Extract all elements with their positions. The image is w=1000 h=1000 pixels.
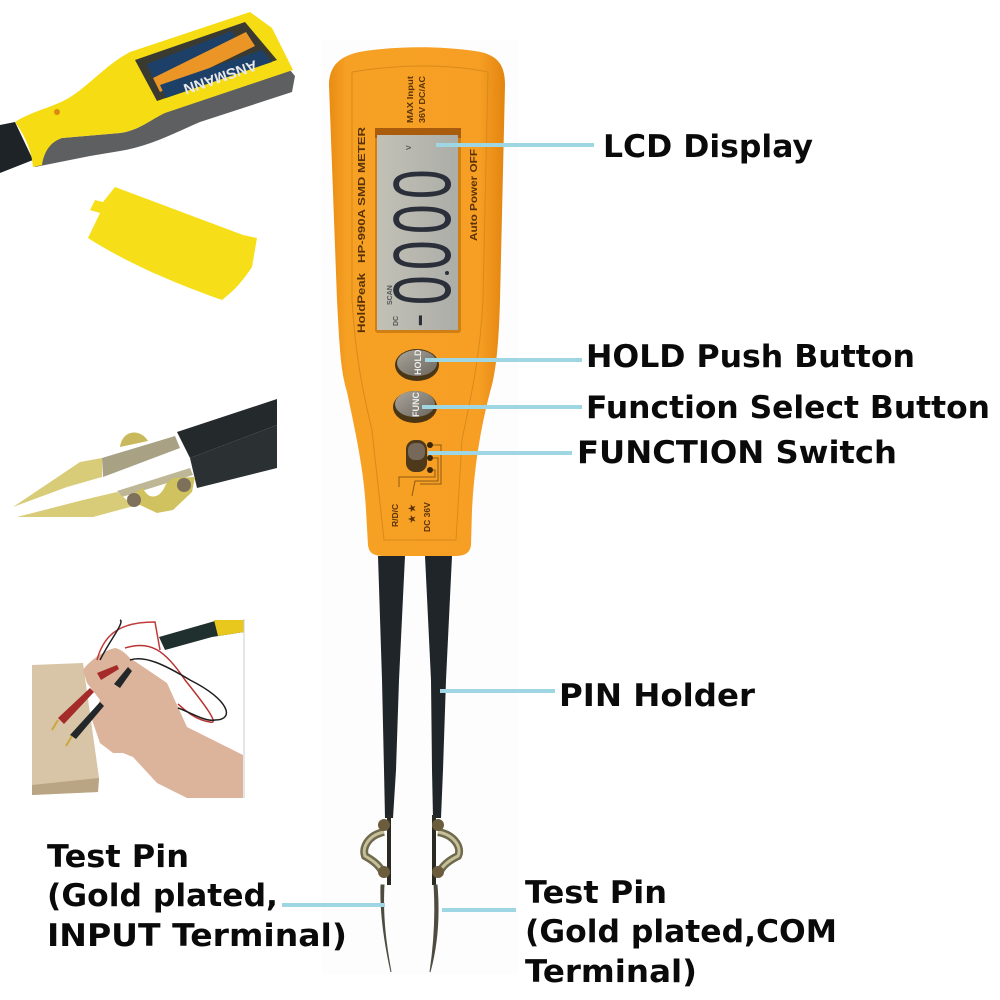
meter printed text: 36V DC/AC [417,76,427,123]
label: test pin com terminal: (Gold plated,COM [525,914,837,950]
meter printed text: HP-990A SMD METER [356,126,368,263]
lcd reading: 0 [377,240,468,270]
switch legends: ★ ★ [407,503,417,523]
label: HOLD Push Button: HOLD Push Button [586,339,915,375]
lcd display: SCAN [387,285,394,305]
func button [393,391,437,423]
lcd display: DC [393,316,400,326]
label: PIN Holder: PIN Holder [559,678,756,714]
photo: gold tweezers [13,399,277,517]
photo: battery cover [88,187,257,300]
label: LCD Display: LCD Display [603,129,813,165]
hold button: HOLD [413,349,423,375]
label: test pin input terminal: Test Pin [47,839,189,875]
hold button [395,349,439,381]
meter printed text: MAX Input [405,76,415,123]
label: Function Select Button: Function Select Button [586,390,990,426]
lcd reading: 0 [377,204,468,234]
label: test pin com terminal: Terminal) [525,954,697,990]
lcd reading: - [396,314,440,327]
label: test pin com terminal [525,875,837,990]
label: test pin input terminal [47,839,347,954]
icon: battery label: ANSMANN [181,56,259,97]
meter printed text: Auto Power OFF [468,148,480,241]
lcd reading: 0 [377,275,468,305]
lcd display: V [406,145,413,150]
lcd reading: 0 [377,169,468,199]
function switch [390,440,441,532]
meter: orange body [329,47,505,556]
label: FUNCTION Switch: FUNCTION Switch [577,435,897,471]
switch legends: DC 36V [422,502,432,532]
meter printed text: HoldPeak [356,272,368,333]
label: test pin com terminal: Test Pin [525,875,667,911]
label: test pin input terminal: INPUT Terminal) [47,918,347,954]
switch legends [390,502,432,532]
meter: pin holders [378,556,452,818]
photo: battery compartment [0,12,295,173]
label: test pin input terminal: (Gold plated, [47,878,278,914]
func button: FUNC [411,392,421,417]
photo: hand using meter on wood [32,619,244,798]
meter printed text [356,76,480,333]
meter: gold plated test pins [364,815,459,972]
lcd display [375,128,468,333]
leader lines [282,143,594,912]
switch legends: R/D/C [390,504,400,527]
lcd reading [377,169,468,327]
